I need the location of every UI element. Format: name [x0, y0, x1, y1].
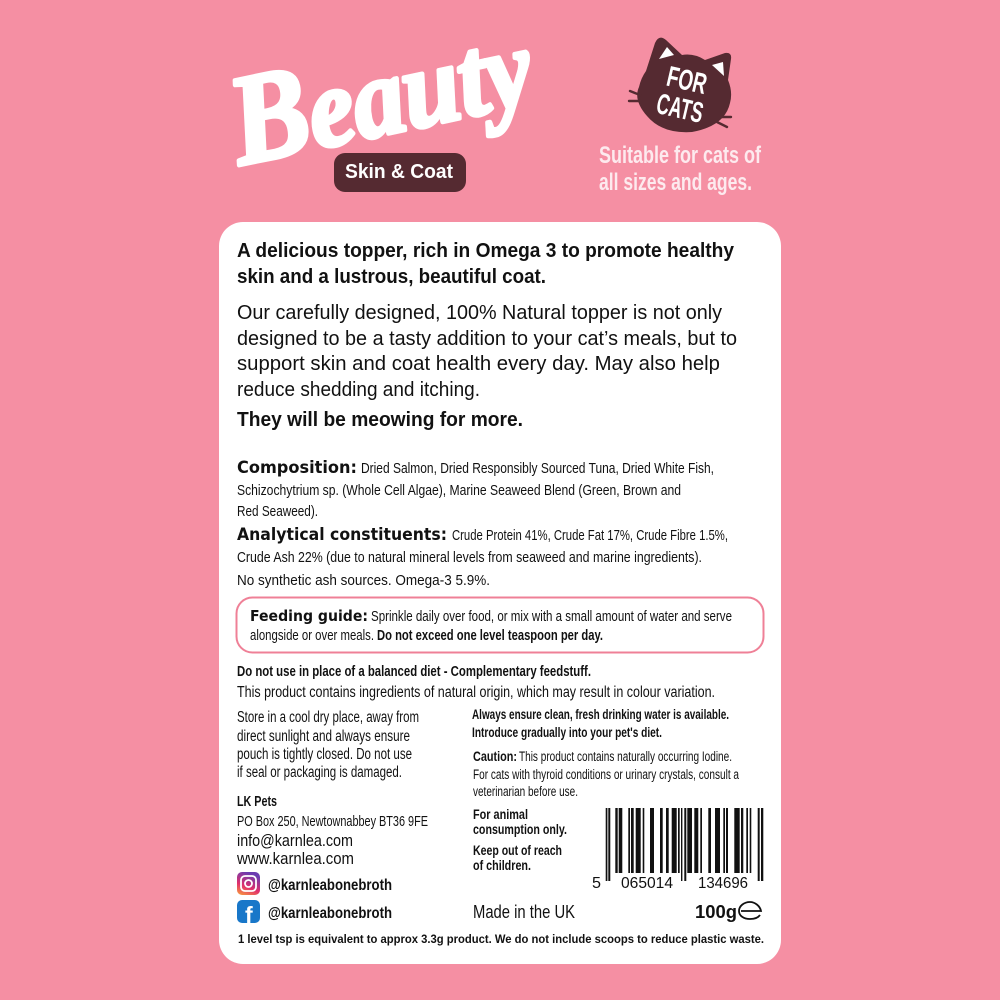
storage instructions: pouch is tightly closed. Do not use [237, 746, 412, 763]
analytical constituents: Crude Protein 41%, Crude Fat 17%, Crude Fibre 1.5%, [452, 527, 728, 544]
storage instructions: if seal or packaging is damaged. [237, 764, 402, 781]
icon: facebook [237, 900, 260, 928]
callout: feeding guide: Do not exceed one level teaspoon per day. [377, 628, 603, 644]
warning notes: Do not use in place of a balanced diet - Complementary feedstuff. [237, 664, 591, 680]
icon: cat head For Cats: FOR [664, 61, 710, 101]
warning notes: This product contains ingredients of natural origin, which may result in colour variation. [237, 684, 715, 701]
animal consumption notes: of children. [473, 858, 531, 873]
badge: Skin & Coat [334, 153, 466, 192]
company contact details [236, 794, 428, 868]
caption: suitable for cats: all sizes and ages. [599, 169, 752, 196]
caption: suitable for cats: Suitable for cats of [599, 142, 762, 169]
animal consumption notes: Keep out of reach [473, 843, 562, 858]
composition: Schizochytrium sp. (Whole Cell Algae), Marine Seaweed Blend (Green, Brown and [237, 482, 681, 499]
composition [237, 458, 714, 520]
company contact details: www.karnlea.com [236, 849, 354, 868]
analytical constituents [237, 525, 728, 589]
title: Beauty: Beauty [215, 0, 544, 193]
caution note: This product contains naturally occurring Iodine. [519, 749, 732, 764]
facebook handle: @karnleabonebroth [268, 905, 392, 922]
company contact details: PO Box 250, Newtownabbey BT36 9FE [237, 813, 428, 830]
barcode [592, 808, 763, 892]
storage instructions [237, 709, 419, 781]
net weight: 100g [695, 902, 737, 922]
callout: feeding guide: Feeding guide: [250, 607, 368, 625]
water and introduction notes: Introduce gradually into your pet's diet. [472, 725, 662, 740]
callout: feeding guide: alongside or over meals. [250, 628, 374, 644]
animal consumption notes: consumption only. [473, 822, 567, 837]
composition: Red Seaweed). [237, 503, 318, 520]
animal consumption notes: For animal [473, 807, 528, 822]
caption: suitable for cats [599, 142, 762, 196]
net weight [695, 902, 761, 922]
description paragraph: support skin and coat health every day. May also help [237, 352, 720, 375]
footnote: 1 level tsp is equivalent to approx 3.3g product. We do not include scoops to reduce plastic waste. [238, 934, 764, 946]
caution note: For cats with thyroid conditions or urinary crystals, consult a [473, 767, 739, 782]
icon: cat head For Cats [629, 38, 731, 132]
storage instructions: Store in a cool dry place, away from [237, 709, 419, 726]
water and introduction notes: Always ensure clean, fresh drinking water is available. [472, 707, 729, 722]
warning notes [237, 664, 715, 701]
analytical constituents: Analytical constituents: [237, 525, 447, 544]
made in the UK: Made in the UK [473, 901, 576, 922]
icon: cat head For Cats: CATS [653, 88, 706, 130]
storage instructions: direct sunlight and always ensure [237, 728, 410, 745]
badge: Skin & Coat: Skin & Coat [345, 161, 453, 183]
intro heading: skin and a lustrous, beautiful coat. [237, 266, 546, 288]
instagram handle: @karnleabonebroth [268, 877, 392, 894]
analytical constituents: Crude Ash 22% (due to natural mineral levels from seaweed and marine ingredients). [237, 549, 702, 566]
composition: Composition: [237, 458, 357, 477]
company contact details: info@karnlea.com [237, 831, 353, 850]
description paragraph: Our carefully designed, 100% Natural topper is not only [237, 301, 723, 324]
barcode: 5 [592, 875, 601, 892]
barcode: 134696 [698, 875, 748, 892]
caution note [473, 749, 739, 799]
caution note: veterinarian before use. [473, 784, 578, 799]
composition: Dried Salmon, Dried Responsibly Sourced Tuna, Dried White Fish, [361, 460, 714, 477]
company contact details: LK Pets [237, 794, 277, 810]
icon: facebook: f [245, 902, 253, 928]
intro heading: A delicious topper, rich in Omega 3 to promote healthy [237, 240, 735, 262]
intro heading [237, 240, 735, 288]
callout: feeding guide [236, 598, 764, 652]
tagline: They will be meowing for more. [237, 409, 523, 431]
description paragraph [237, 301, 737, 401]
icon: instagram [237, 872, 260, 895]
caution note: Caution: [473, 749, 517, 764]
animal consumption notes [473, 807, 567, 873]
description paragraph: reduce shedding and itching. [237, 378, 480, 401]
panel: product information [219, 222, 781, 964]
callout: feeding guide: Sprinkle daily over food, or mix with a small amount of water and serve [371, 609, 732, 625]
analytical constituents: No synthetic ash sources. Omega-3 5.9%. [237, 572, 490, 589]
water and introduction notes [472, 707, 729, 740]
description paragraph: designed to be a tasty addition to your cat’s meals, but to [237, 327, 737, 350]
barcode: 065014 [621, 875, 673, 892]
